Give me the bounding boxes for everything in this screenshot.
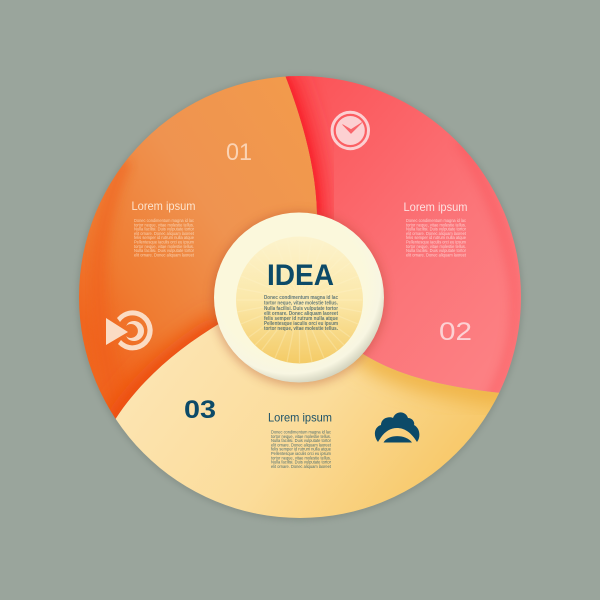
- sunburst rays: [236, 237, 362, 363]
- number 01: 01: [226, 139, 252, 166]
- body text left: elit ornare. Donec aliquam laoreet: [134, 252, 195, 257]
- center body text: tortor neque, vitae molestie tellus.: [264, 326, 338, 332]
- center body text: elit ornare. Donec aliquam laoreet: [264, 311, 338, 317]
- body text bottom: [271, 430, 332, 469]
- body text bottom: Nulla facilisi. Duis vulputate tortor: [271, 438, 331, 443]
- center ring shadow: [212, 212, 386, 386]
- center body text: Pellentesque iaculis orci eu ipsum: [264, 321, 338, 327]
- body text left: Donec condimentum magna id lac: [134, 218, 195, 223]
- panel: red segment 02: [286, 76, 521, 393]
- panel: orange segment 01: [79, 76, 317, 419]
- body text bottom: elit ornare. Donec aliquam laoreet: [271, 464, 332, 469]
- panel: yellow segment 03: [116, 324, 500, 518]
- body text bottom: elit ornare. Donec aliquam laoreet: [271, 442, 332, 447]
- disc shadow: [77, 75, 523, 521]
- outer ring: [214, 212, 384, 382]
- body text left: elit ornare. Donec aliquam laoreet: [134, 231, 195, 236]
- center body text: Donec condimentum magna id lac: [264, 295, 338, 301]
- number 02: 02: [439, 318, 472, 346]
- body text right: felis semper id rutrum nulla atque: [406, 235, 466, 240]
- body text left: [134, 218, 195, 257]
- heading: lorem ipsum right: Lorem ipsum: [404, 200, 468, 214]
- body text right: Nulla facilisi. Duis vulputate tortor: [406, 227, 466, 232]
- center body text: felis semper id rutrum nulla atque: [264, 316, 338, 322]
- panel: disc segments: [79, 76, 521, 518]
- center body text: tortor neque, vitae molestie tellus.: [264, 300, 338, 306]
- infographic: [77, 75, 523, 521]
- inner sunburst disc: [236, 236, 363, 364]
- body text bottom: tortor neque, vitae molestie tellus.: [271, 434, 331, 439]
- heading: lorem ipsum bottom: Lorem ipsum: [268, 410, 332, 424]
- heading: IDEA: IDEA: [267, 259, 334, 292]
- body text right: tortor neque, vitae molestie tellus.: [406, 222, 466, 227]
- number 03: 03: [184, 396, 216, 424]
- center body text: Nulla facilisi. Duis vulputate tortor: [264, 306, 338, 312]
- body text right: Pellentesque iaculis orci eu ipsum: [406, 240, 466, 244]
- body text left: Nulla facilisi. Duis vulputate tortor: [134, 248, 194, 253]
- body text bottom: Donec condimentum magna id lac: [271, 430, 332, 434]
- body text bottom: Pellentesque iaculis orci eu ipsum: [271, 451, 331, 456]
- body text left: Nulla facilisi. Duis vulputate tortor: [134, 227, 194, 232]
- icon: clock: [332, 112, 368, 149]
- body text bottom: tortor neque, vitae molestie tellus.: [271, 455, 331, 460]
- body text left: tortor neque, vitae molestie tellus.: [134, 222, 194, 227]
- body text right: [406, 218, 467, 257]
- center body text: [264, 295, 338, 332]
- body text bottom: felis semper id rutrum nulla atque: [271, 447, 331, 452]
- body text left: tortor neque, vitae molestie tellus.: [134, 244, 194, 249]
- center circle: idea: [214, 212, 384, 382]
- body text right: tortor neque, vitae molestie tellus.: [406, 244, 466, 249]
- body text left: Pellentesque iaculis orci eu ipsum: [134, 240, 194, 244]
- heading: lorem ipsum left: Lorem ipsum: [132, 199, 196, 213]
- body text left: felis semper id rutrum nulla atque: [134, 235, 194, 240]
- body text right: elit ornare. Donec aliquam laoreet: [406, 231, 467, 236]
- body text bottom: Nulla facilisi. Duis vulputate tortor: [271, 460, 331, 465]
- body text right: elit ornare. Donec aliquam laoreet: [406, 252, 467, 257]
- icon: cloud over arc: [375, 412, 419, 442]
- body text right: Donec condimentum magna id lac: [406, 218, 467, 223]
- body text right: Nulla facilisi. Duis vulputate tortor: [406, 248, 466, 253]
- icon: target with arrow: [106, 310, 153, 350]
